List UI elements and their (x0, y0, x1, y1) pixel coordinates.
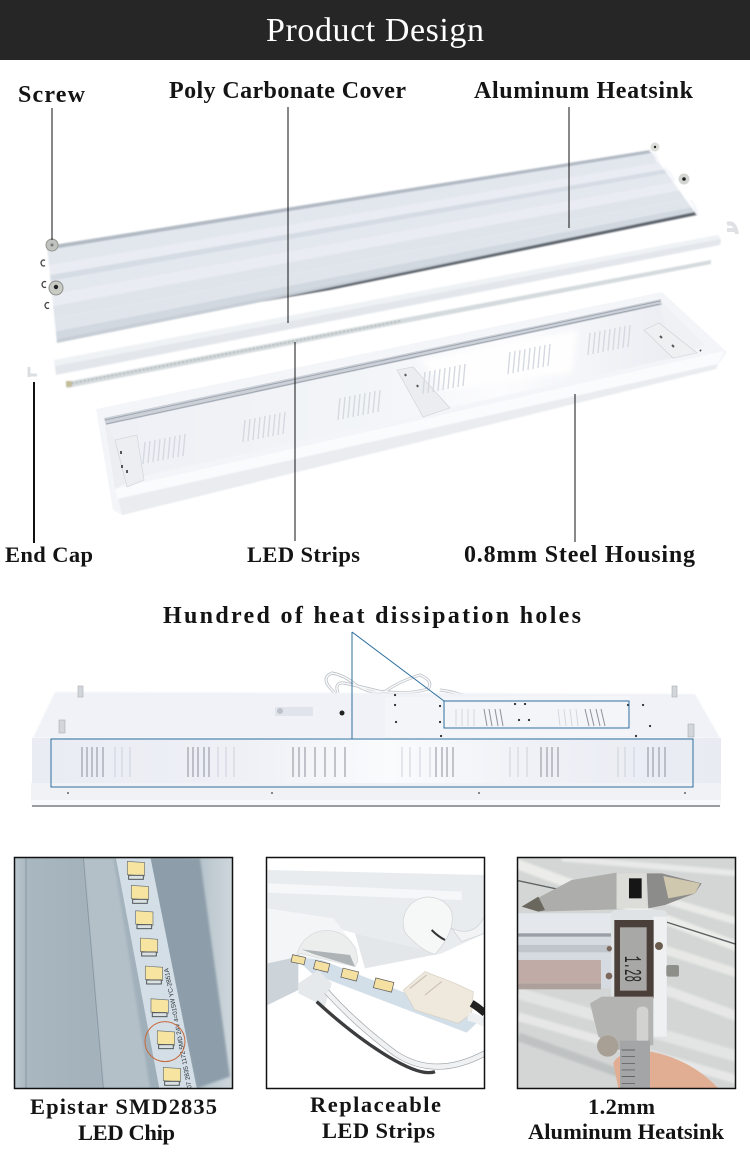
steel housing (96, 292, 727, 515)
aluminum tube (518, 937, 611, 988)
caption: LED chip: Epistar SMD2835 (30, 1094, 217, 1119)
orange highlight circle (145, 1022, 185, 1062)
caption: aluminum heatsink: Aluminum Heatsink (528, 1119, 724, 1144)
top face (33, 692, 720, 738)
background ridges (515, 858, 738, 1080)
bottom lip (31, 783, 721, 807)
poly carbonate cover (54, 235, 721, 375)
caliper jaws (522, 873, 617, 912)
logo block (617, 873, 647, 908)
ruler (620, 1041, 650, 1091)
screw holes on plate (395, 695, 650, 736)
caption: aluminum heatsink: 1.2mm (588, 1094, 655, 1119)
power cable (326, 673, 470, 712)
mounting bolts (59, 686, 694, 737)
aluminum heatsink (47, 150, 697, 343)
label: LED strips: LED Strips (247, 542, 360, 567)
thumb rest (590, 997, 653, 1050)
photo: caliper measuring heatsink (515, 857, 738, 1091)
top vents (456, 709, 605, 726)
title banner: Product Design (266, 12, 484, 49)
photo: LED chip: 07 2835 1172 5MD 24V 4=015W YC-2851A (163, 967, 194, 1089)
caption: aluminum heatsink (528, 1094, 724, 1144)
caption: replaceable LED strips: LED Strips (322, 1118, 435, 1143)
LED strip (66, 260, 711, 388)
caption: LED chip (30, 1094, 217, 1145)
heading: heat dissipation holes: Hundred of heat dissipation holes (163, 603, 581, 629)
connector (403, 972, 473, 1023)
label: aluminum heatsink: Aluminum Heatsink (474, 78, 694, 104)
caption: replaceable LED strips (310, 1092, 441, 1143)
screws (41, 142, 690, 308)
caption: replaceable LED strips: Replaceable (310, 1092, 441, 1117)
LCD display (617, 927, 647, 991)
front face (32, 738, 721, 784)
mounting plate (385, 696, 630, 738)
label sticker and cable gland (275, 707, 344, 716)
title banner (0, 0, 750, 60)
exploded view of fixture (29, 142, 737, 515)
tubes (268, 870, 485, 953)
aluminum channel shading (83, 858, 230, 1088)
front vents (82, 747, 665, 777)
end caps (297, 930, 358, 967)
label: screw: Screw (18, 82, 86, 108)
label: poly carbonate cover: Poly Carbonate Cover (169, 78, 406, 104)
LED board (293, 957, 478, 1033)
fixture back view (31, 632, 721, 807)
label: steel housing: 0.8mm Steel Housing (464, 542, 695, 568)
end caps (29, 223, 737, 377)
wires (472, 1003, 485, 1013)
caption: LED chip: LED Chip (78, 1120, 175, 1145)
blue callout boxes and leader lines (51, 632, 693, 787)
LCD display: 1.28 (617, 956, 644, 982)
label: end cap: End Cap (5, 542, 93, 567)
photo: LED chip (14, 857, 233, 1089)
finger (613, 1051, 718, 1088)
LED board (116, 858, 197, 1088)
photo: replaceable LED strips (266, 857, 485, 1088)
caliper body (611, 910, 667, 1038)
